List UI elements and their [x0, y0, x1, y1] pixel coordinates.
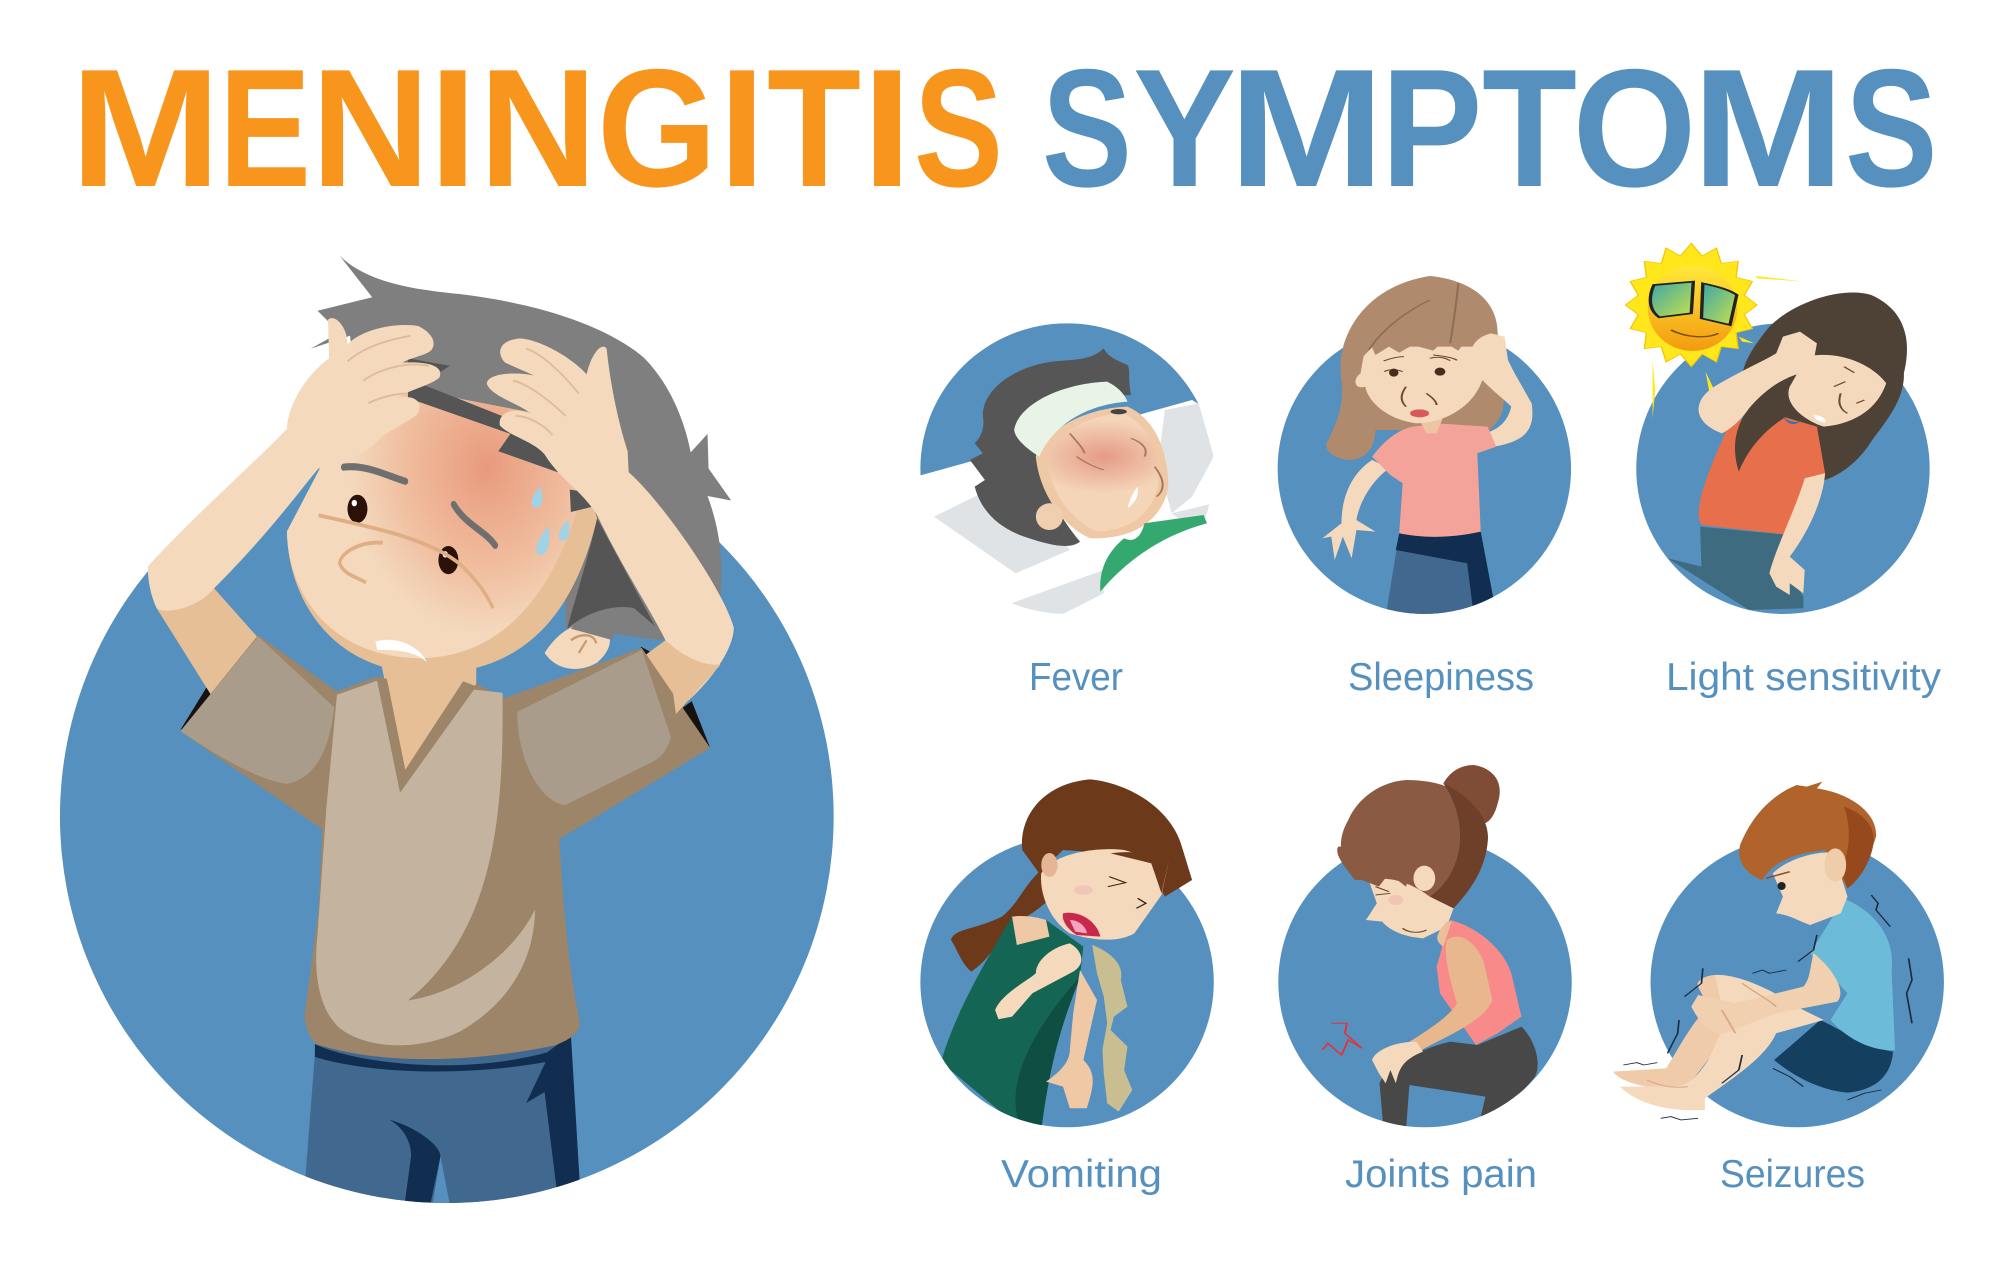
blue circle — [1636, 323, 1930, 614]
title: O — [1572, 34, 1696, 222]
ear — [1413, 866, 1435, 891]
blue circle and bedding — [914, 320, 1219, 614]
mouth — [375, 640, 427, 662]
title: S — [1042, 34, 1132, 222]
title: M — [70, 34, 221, 222]
label: Light sensitivity: Light sensitivity — [1666, 656, 1942, 699]
eyebrows — [344, 467, 495, 545]
facial marks — [1375, 887, 1426, 932]
title: N — [311, 34, 430, 222]
title: I — [429, 34, 477, 222]
face creases and nose — [319, 515, 493, 608]
title: M — [1692, 34, 1844, 222]
shirt — [1810, 898, 1895, 1050]
shirt — [180, 635, 710, 1059]
shirt — [1699, 417, 1825, 535]
title: T — [1482, 34, 1577, 222]
title: I — [719, 34, 765, 222]
dark leggings — [1380, 1027, 1538, 1130]
label: Vomiting: Vomiting — [1001, 1153, 1162, 1196]
mouth — [1410, 409, 1429, 417]
right arm and hand — [487, 339, 734, 711]
hair — [1739, 782, 1876, 888]
raised arm and hand — [1699, 332, 1817, 433]
shoulder skin — [1012, 916, 1049, 945]
fringe — [1356, 292, 1483, 363]
title: M — [1228, 34, 1384, 222]
hair — [970, 348, 1131, 546]
ear — [1036, 503, 1063, 530]
symptom: joints pain — [1278, 765, 1572, 1130]
wet towel — [1014, 382, 1128, 457]
ear — [545, 622, 610, 669]
lower arm — [1046, 970, 1097, 1108]
upper arms — [157, 588, 718, 717]
raised arm — [1472, 337, 1532, 447]
green shirt — [1100, 515, 1207, 592]
blue circle — [1278, 837, 1572, 1127]
raised hand on chest — [995, 943, 1081, 1019]
hair — [1341, 780, 1488, 908]
pain lightning — [1322, 1023, 1362, 1055]
sleeve linings — [180, 647, 710, 748]
dark fringe — [408, 358, 655, 629]
hand on knee — [1372, 1042, 1423, 1083]
shirt — [1372, 423, 1496, 537]
shorts — [1774, 1020, 1893, 1093]
title: N — [479, 34, 597, 222]
symptom: vomiting — [920, 779, 1214, 1130]
face — [1041, 849, 1168, 940]
face — [1788, 355, 1886, 427]
label: Joints pain: Joints pain — [1345, 1153, 1537, 1196]
dress — [941, 917, 1083, 1130]
far leg and foot — [1613, 975, 1742, 1087]
title: G — [597, 34, 717, 222]
mouth — [1063, 913, 1100, 937]
label: Sleepiness: Sleepiness — [1348, 656, 1534, 699]
label: Seizures: Seizures — [1720, 1153, 1865, 1196]
blue circle — [1651, 837, 1944, 1127]
arm down — [1769, 473, 1825, 595]
pink top — [1437, 920, 1521, 1045]
near leg and foot — [1620, 975, 1824, 1110]
left arm — [1322, 460, 1389, 560]
light rays — [1653, 276, 1805, 418]
title — [70, 34, 1938, 222]
title: S — [914, 34, 1003, 222]
facial features — [1384, 355, 1457, 407]
closed eyes — [1108, 877, 1146, 908]
ponytail — [951, 860, 1063, 972]
hair fringe — [1111, 852, 1168, 893]
pants — [1386, 532, 1494, 617]
title: T — [767, 34, 861, 222]
title: I — [862, 34, 912, 222]
facial features — [1070, 433, 1163, 497]
jeans — [1667, 527, 1803, 610]
fringe — [1337, 847, 1413, 887]
neck and face — [1366, 879, 1454, 938]
symptom: light sensitivity — [1625, 243, 1930, 614]
facial features — [1834, 367, 1864, 413]
neck — [1418, 417, 1443, 433]
symptom: seizures — [1613, 782, 1944, 1127]
face — [1036, 407, 1168, 538]
eyes — [347, 495, 458, 574]
blue circle — [1278, 323, 1571, 614]
hair — [1326, 276, 1504, 460]
neck collar — [1783, 417, 1803, 424]
title: S — [1845, 34, 1938, 222]
hand on head — [1471, 333, 1508, 377]
arm — [1399, 937, 1492, 1053]
main blue circle — [60, 430, 834, 1203]
neck and collar — [376, 640, 476, 793]
ear — [1824, 848, 1846, 882]
blue circle — [920, 837, 1214, 1127]
hair back — [311, 256, 731, 640]
face — [287, 381, 597, 674]
title: P — [1381, 34, 1482, 222]
arm — [1691, 953, 1840, 1034]
sweat drops — [532, 486, 569, 555]
tremor marks — [1623, 895, 1912, 1120]
eye and brow — [1766, 872, 1790, 878]
hair bun — [1443, 765, 1500, 824]
symptom: fever — [914, 320, 1219, 614]
symptom: sleepiness — [1278, 276, 1571, 617]
hair back — [1742, 293, 1907, 483]
front hair lock — [1735, 400, 1786, 472]
vomit — [1092, 945, 1132, 1112]
finger lines — [347, 336, 579, 435]
title: Y — [1133, 34, 1236, 222]
main illustration: man with headache — [60, 256, 834, 1211]
left arm and hand — [148, 318, 440, 611]
label: Fever: Fever — [1029, 656, 1123, 699]
face — [1355, 347, 1484, 423]
title: E — [219, 34, 311, 222]
ear — [1041, 853, 1058, 877]
pants — [303, 1034, 581, 1211]
neck and face — [1773, 852, 1847, 925]
hair — [1022, 779, 1192, 897]
sun with sunglasses — [1625, 243, 1757, 367]
